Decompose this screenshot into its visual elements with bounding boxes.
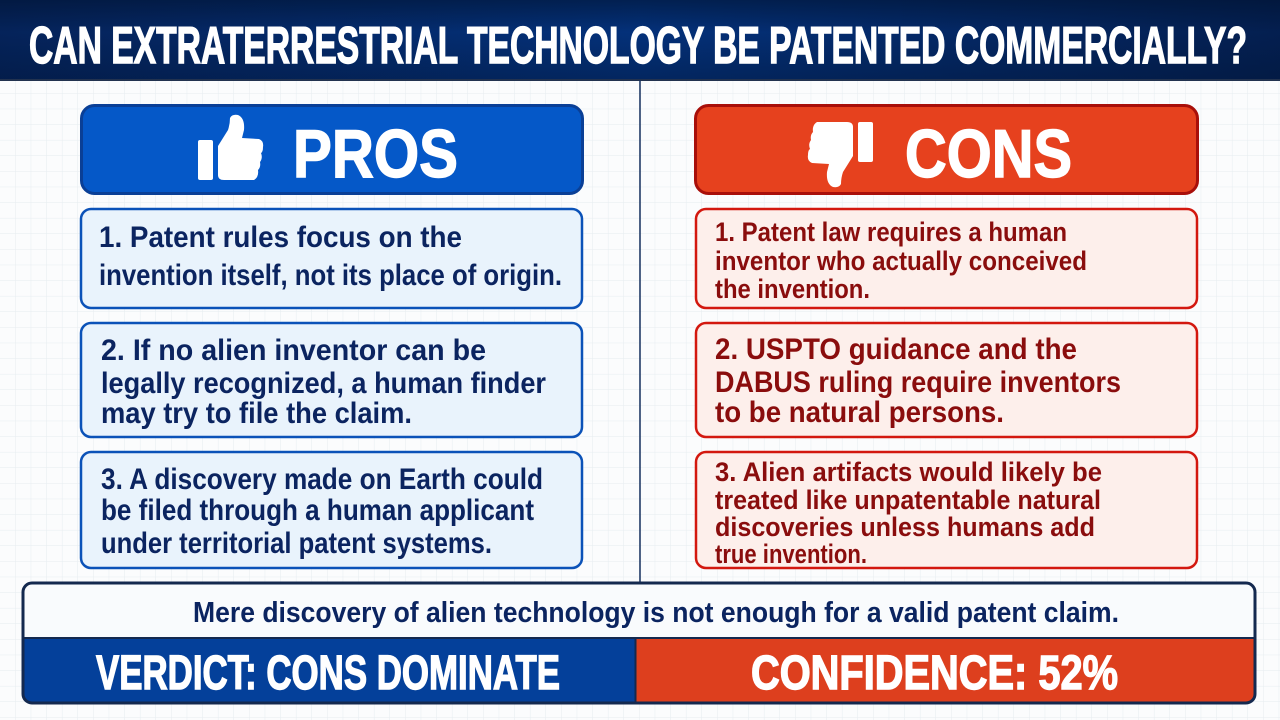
pros header [82, 106, 582, 194]
con 3 [696, 452, 1197, 569]
cons label: CONS [905, 116, 1072, 192]
pro 3: 3. A discovery made on Earth could [101, 463, 543, 496]
panel: pros [81, 106, 582, 568]
verdict summary: Mere discovery of alien technology is not enough for a valid patent claim. [193, 597, 1119, 629]
confidence bar: CONFIDENCE: 52% [751, 647, 1118, 700]
pro 3: under territorial patent systems. [101, 527, 492, 560]
con 1: inventor who actually conceived [715, 246, 1087, 276]
con 3: 3. Alien artifacts would likely be [715, 457, 1102, 487]
con 3: discoveries unless humans add [715, 512, 1095, 542]
verdict bar [23, 639, 635, 703]
pro 3: be filed through a human applicant [101, 494, 534, 527]
con 2: to be natural persons. [715, 396, 1004, 429]
panel: cons [696, 106, 1198, 569]
pro 1: 1. Patent rules focus on the [99, 221, 462, 254]
pros label: PROS [293, 116, 458, 192]
icon: thumbs up [198, 115, 263, 180]
pro 1: invention itself, not its place of origin. [99, 259, 562, 292]
pro 2 [81, 323, 582, 437]
confidence bar [635, 639, 1255, 703]
con 1 [696, 209, 1197, 308]
pro 2: may try to file the claim. [101, 397, 412, 430]
con 3: treated like unpatentable natural [715, 485, 1101, 515]
con 2 [696, 323, 1197, 437]
con 2: 2. USPTO guidance and the [715, 333, 1077, 366]
con 2: DABUS ruling require inventors [715, 366, 1121, 399]
verdict panel [22, 583, 1256, 703]
pro 2: 2. If no alien inventor can be [101, 334, 486, 367]
center divider [639, 80, 641, 583]
con 1: 1. Patent law requires a human [715, 217, 1067, 247]
pro 2: legally recognized, a human finder [101, 367, 546, 400]
pro 1 [81, 209, 582, 308]
icon: thumbs down [808, 122, 873, 187]
con 1: the invention. [715, 274, 870, 304]
verdict bar: VERDICT: CONS DOMINATE [96, 647, 560, 700]
con 3: true invention. [715, 539, 867, 569]
cons header [696, 106, 1198, 194]
title banner [0, 0, 1280, 81]
pro 3 [81, 452, 582, 568]
